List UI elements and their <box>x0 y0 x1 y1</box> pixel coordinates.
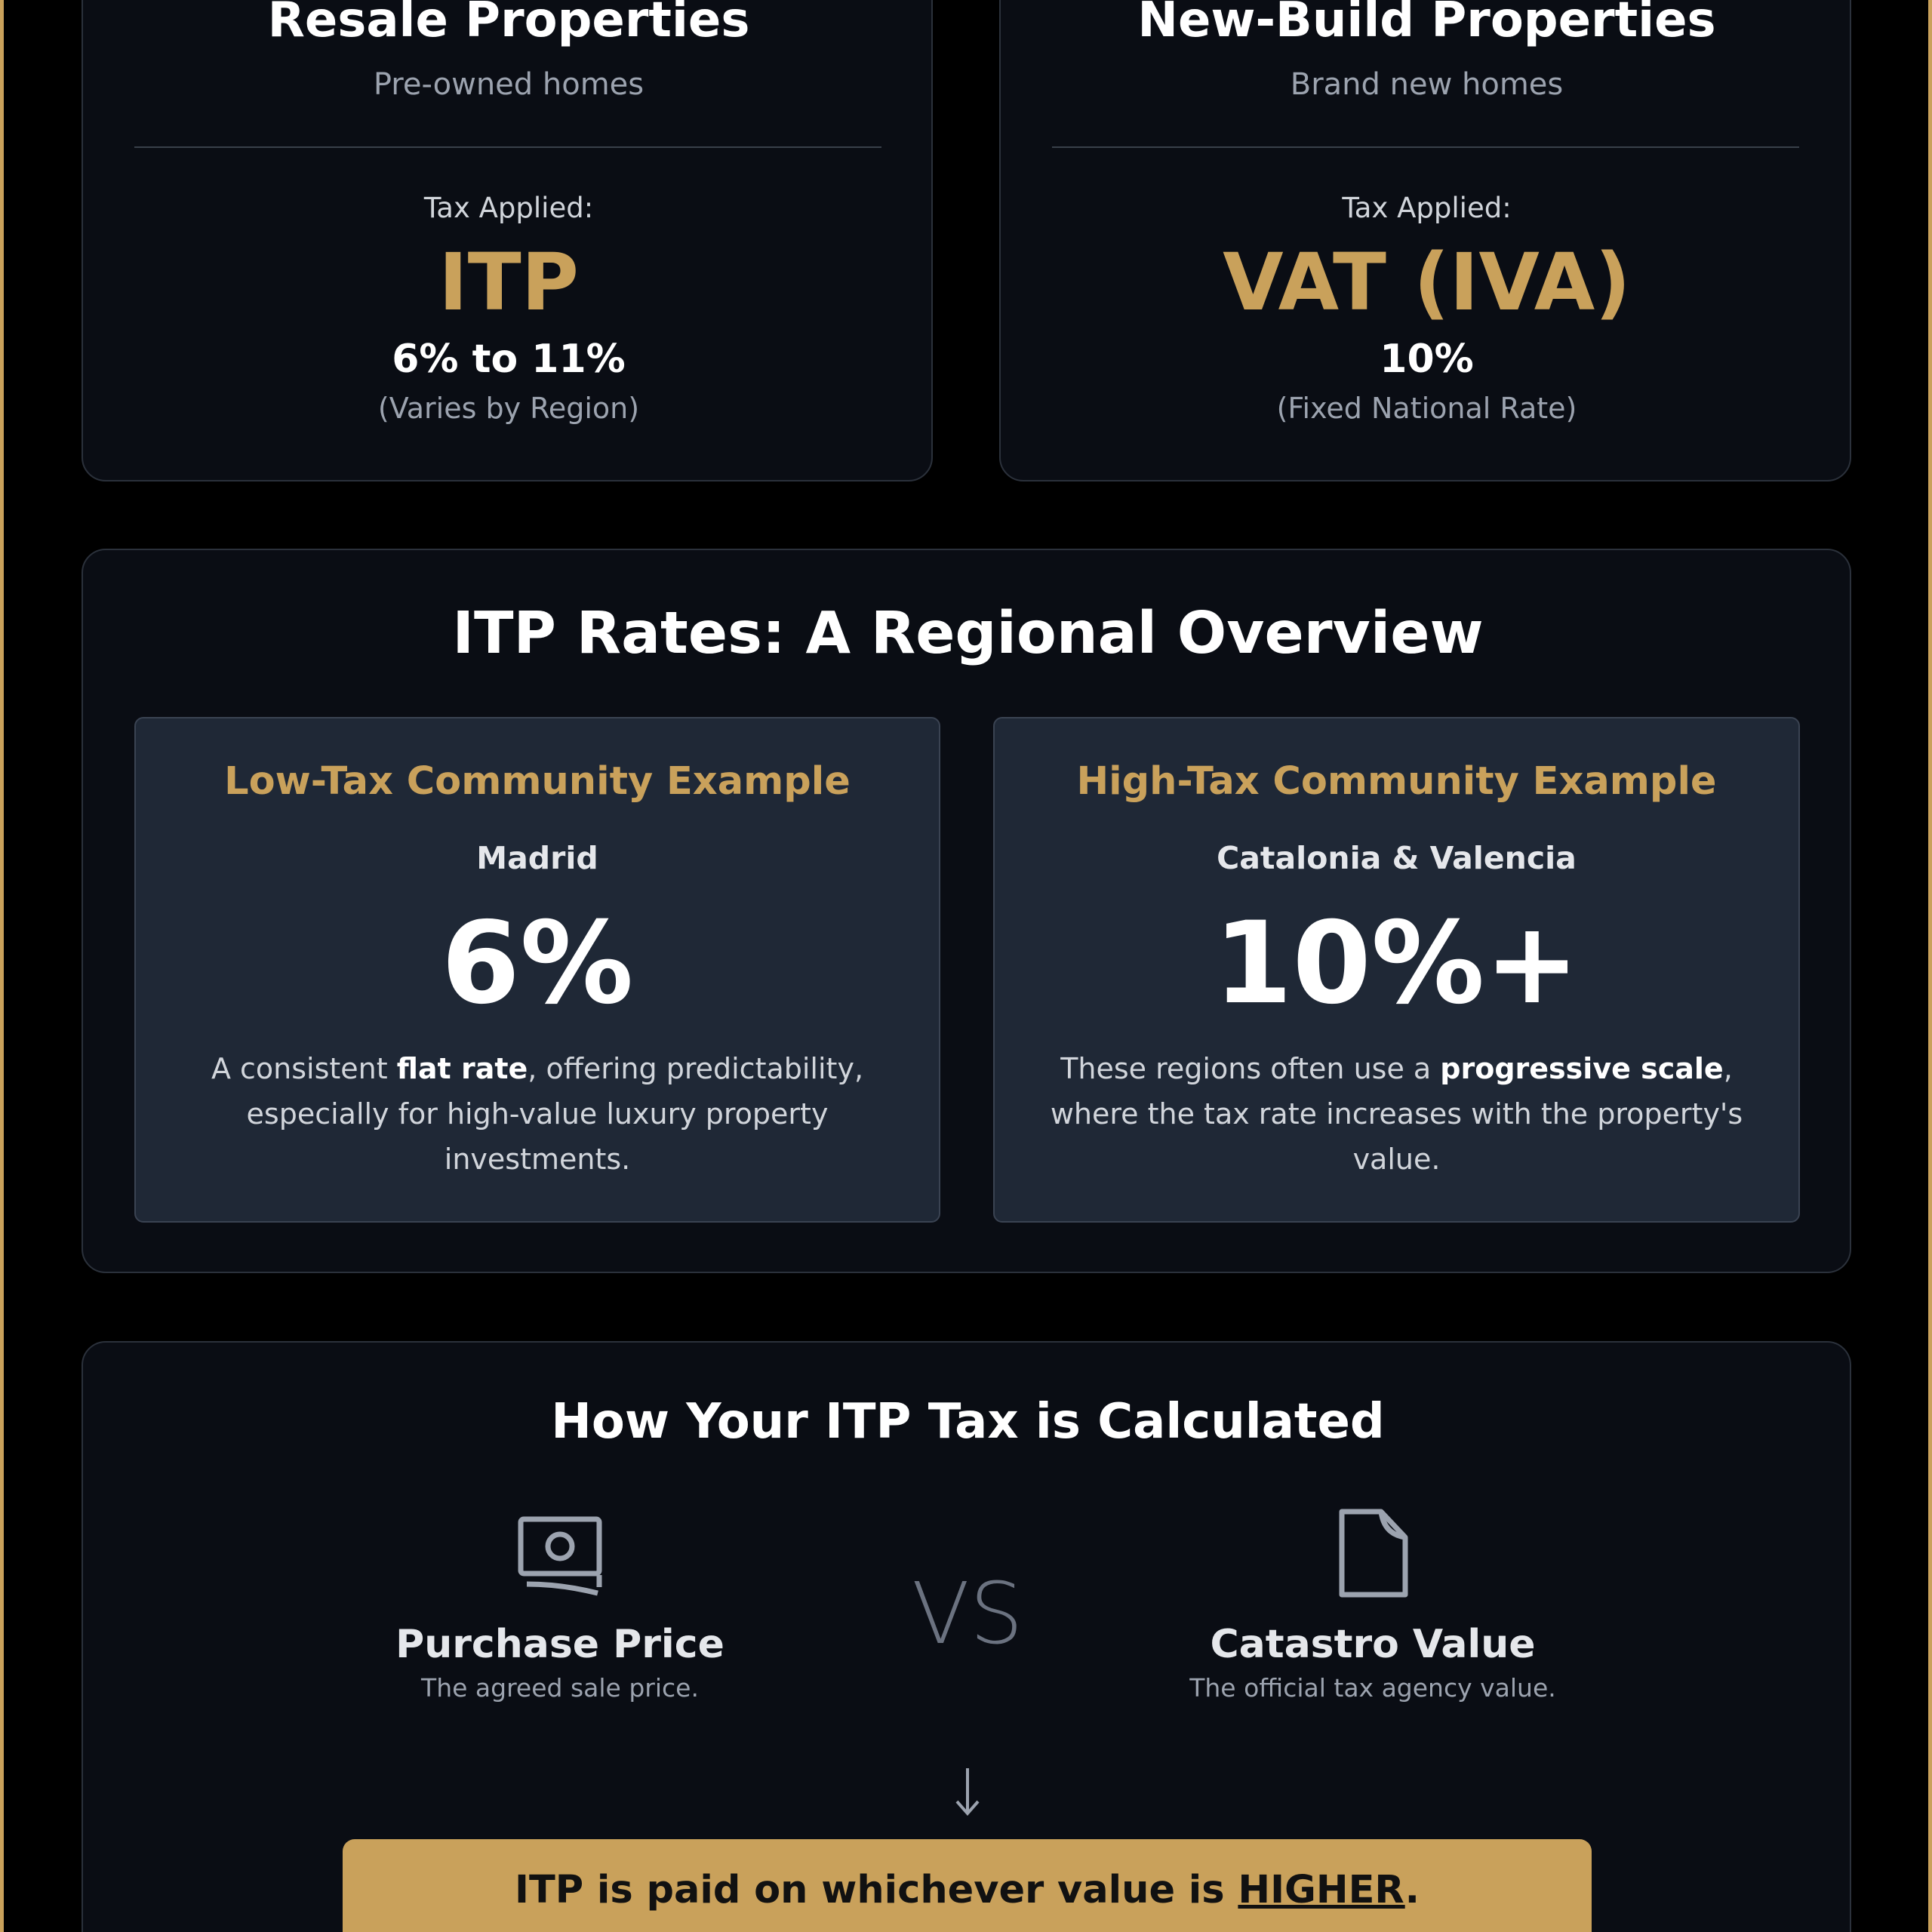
heading: ITP Rates: A Regional Overview <box>452 600 1484 667</box>
sub heading: High-Tax Community Example <box>1076 759 1717 804</box>
item: purchase price: The agreed sale price. <box>421 1673 699 1703</box>
callout: higher value: ITP is paid on whichever value is HIGHER. <box>515 1868 1420 1912</box>
tax name ITP: ITP <box>438 236 579 328</box>
description: These regions often use a progressive scale, where the tax rate increases with the property's value. <box>1051 1052 1743 1176</box>
subtitle: Brand new homes <box>1291 67 1563 102</box>
rate: 6% to 11% <box>392 337 626 382</box>
panel: how ITP is calculated <box>82 1341 1851 1932</box>
item: catastro value: Catastro Value <box>1210 1622 1536 1667</box>
big rate: 10%+ <box>1214 898 1580 1029</box>
rate note: (Fixed National Rate) <box>1277 392 1577 425</box>
rate note: (Varies by Region) <box>378 392 639 425</box>
VS label: VS <box>912 1565 1023 1663</box>
region name: Madrid <box>476 840 598 876</box>
panel: resale properties <box>82 0 933 481</box>
icon: money <box>518 1517 602 1595</box>
arrow: down <box>955 1768 980 1816</box>
callout: higher value <box>343 1839 1592 1932</box>
sub heading: Low-Tax Community Example <box>224 759 851 804</box>
sub-panel: high tax <box>993 717 1800 1223</box>
rate: 10% <box>1380 337 1474 382</box>
heading: How Your ITP Tax is Calculated <box>551 1394 1385 1450</box>
big rate: 6% <box>441 898 633 1029</box>
subtitle: Pre-owned homes <box>374 67 644 102</box>
item: purchase price <box>395 1622 724 1703</box>
sub-panel: low tax <box>134 717 940 1223</box>
tax name VAT: VAT (IVA) <box>1223 236 1631 328</box>
panel: new-build properties <box>999 0 1851 481</box>
item: catastro value <box>1189 1622 1556 1703</box>
panel: ITP regional overview <box>82 549 1851 1273</box>
item: purchase price: Purchase Price <box>395 1622 724 1667</box>
region name: Catalonia & Valencia <box>1217 840 1577 876</box>
tax label: Tax Applied: <box>1342 192 1512 224</box>
description: A consistent flat rate, offering predictability, especially for high-value luxury property investments. <box>211 1052 863 1176</box>
tax label: Tax Applied: <box>424 192 593 224</box>
item: catastro value: The official tax agency value. <box>1189 1673 1556 1703</box>
icon: document <box>1339 1509 1408 1597</box>
